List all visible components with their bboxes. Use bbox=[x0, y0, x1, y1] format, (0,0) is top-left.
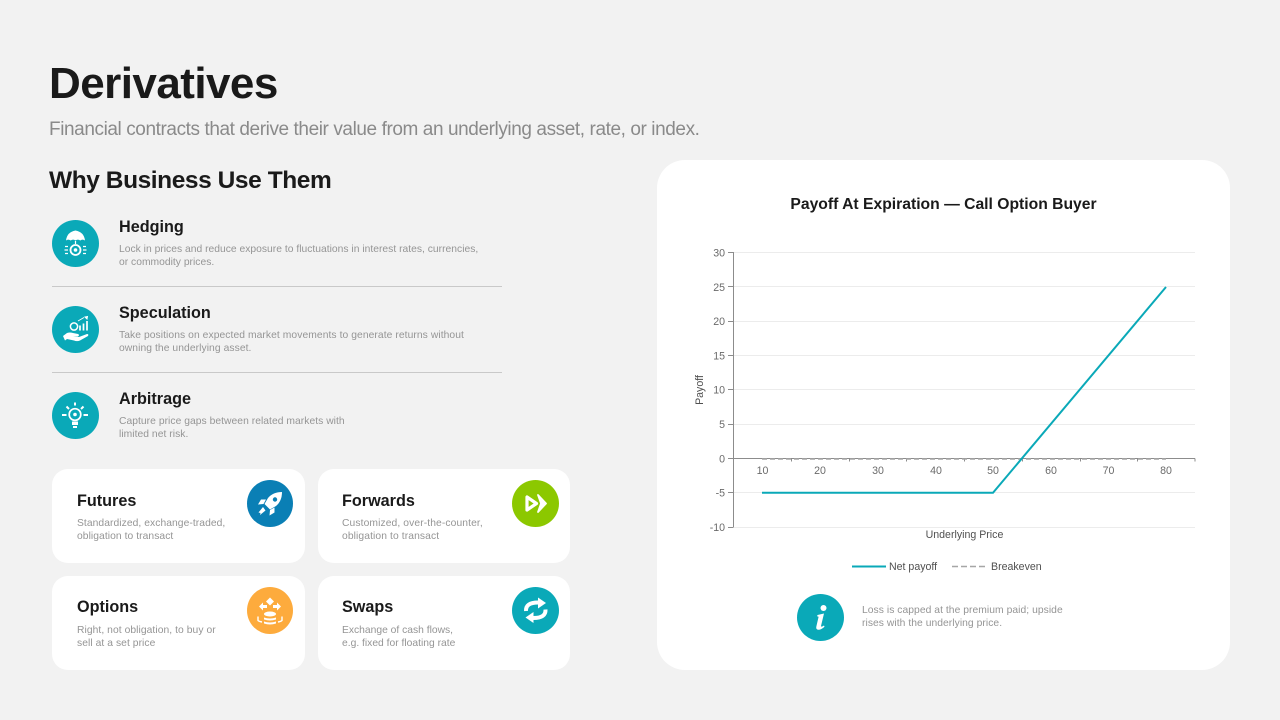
card: Swaps bbox=[318, 576, 570, 670]
axes bbox=[728, 252, 1195, 528]
description: Futures: obligation to transact bbox=[77, 531, 173, 542]
x axis labels bbox=[757, 465, 1172, 477]
y axis labels: 0 bbox=[719, 454, 725, 466]
y axis labels: 10 bbox=[713, 384, 725, 396]
y axis labels: 20 bbox=[713, 316, 725, 328]
callout text bbox=[862, 605, 1063, 629]
divider bbox=[52, 286, 502, 287]
y axis labels bbox=[710, 248, 725, 534]
y axis title: Payoff bbox=[694, 375, 706, 405]
heading: Speculation: Speculation bbox=[119, 304, 211, 322]
legend: Net payoff bbox=[889, 561, 937, 573]
x axis labels: 80 bbox=[1160, 465, 1172, 477]
description: Options: Right, not obligation, to buy or bbox=[77, 625, 216, 636]
panel: payoff chart bbox=[657, 160, 1230, 670]
card: Options bbox=[52, 576, 305, 670]
heading: Futures: Futures bbox=[77, 492, 136, 510]
callout text: Loss is capped at the premium paid; upside bbox=[862, 605, 1063, 616]
icon: info bbox=[797, 594, 844, 641]
y axis labels: 30 bbox=[713, 248, 725, 260]
section heading: Why Business Use Them bbox=[49, 167, 331, 194]
description: Hedging: or commodity prices. bbox=[119, 257, 214, 268]
chart title: Payoff At Expiration — Call Option Buyer bbox=[790, 196, 1097, 213]
description: Swaps: e.g. fixed for floating rate bbox=[342, 638, 455, 649]
x axis labels: 30 bbox=[872, 465, 884, 477]
description: Hedging: Lock in prices and reduce exposure to fluctuations in interest rates, currencies, bbox=[119, 244, 478, 255]
icon: rocket bbox=[247, 480, 293, 527]
description: Forwards bbox=[342, 518, 483, 542]
icon: coins and arrows bbox=[247, 587, 293, 634]
description: Arbitrage: Capture price gaps between related markets with bbox=[119, 416, 345, 427]
heading: Arbitrage: Arbitrage bbox=[119, 390, 191, 408]
description: Swaps bbox=[342, 625, 455, 649]
legend: Breakeven bbox=[991, 561, 1042, 573]
description: Swaps: Exchange of cash flows, bbox=[342, 625, 453, 636]
heading: Hedging: Hedging bbox=[119, 218, 184, 236]
x axis title: Underlying Price bbox=[926, 529, 1003, 541]
description: Options bbox=[77, 625, 216, 649]
description: Arbitrage: limited net risk. bbox=[119, 429, 188, 440]
list item: Hedging bbox=[52, 218, 478, 268]
x axis labels: 40 bbox=[930, 465, 942, 477]
description: Options: sell at a set price bbox=[77, 638, 155, 649]
x axis labels: 50 bbox=[987, 465, 999, 477]
x axis labels: 20 bbox=[814, 465, 826, 477]
description: Speculation bbox=[119, 330, 464, 354]
description: Futures bbox=[77, 518, 225, 542]
description: Hedging bbox=[119, 244, 478, 268]
heading: Options: Options bbox=[77, 598, 138, 616]
description: Forwards: Customized, over-the-counter, bbox=[342, 518, 483, 529]
divider bbox=[52, 372, 502, 373]
subtitle: Financial contracts that derive their value from an underlying asset, rate, or index. bbox=[49, 119, 700, 140]
icon: hand with chart bbox=[52, 306, 99, 353]
description: Forwards: obligation to transact bbox=[342, 531, 439, 542]
card: Forwards bbox=[318, 469, 570, 563]
description: Futures: Standardized, exchange-traded, bbox=[77, 518, 225, 529]
card: Futures bbox=[52, 469, 305, 563]
title: Derivatives bbox=[49, 59, 278, 108]
icon: fast forward bbox=[512, 480, 559, 527]
breakeven line bbox=[762, 458, 1166, 460]
y axis labels: 15 bbox=[713, 350, 725, 362]
y axis labels: -10 bbox=[710, 522, 725, 534]
y axis labels: -5 bbox=[716, 488, 725, 500]
heading: Swaps: Swaps bbox=[342, 598, 393, 616]
x axis labels: 60 bbox=[1045, 465, 1057, 477]
legend bbox=[852, 561, 1042, 573]
icon: umbrella and coin bbox=[52, 220, 99, 267]
heading: Forwards: Forwards bbox=[342, 492, 415, 510]
net payoff line bbox=[762, 287, 1166, 493]
x axis labels: 10 bbox=[757, 465, 768, 477]
icon: light bulb with dollar bbox=[52, 392, 99, 439]
list item: Arbitrage bbox=[52, 390, 345, 440]
description: Arbitrage bbox=[119, 416, 345, 440]
y axis labels: 5 bbox=[719, 419, 725, 431]
icon: refresh arrows bbox=[512, 587, 559, 634]
description: Speculation: owning the underlying asset. bbox=[119, 343, 251, 354]
x axis labels: 70 bbox=[1103, 465, 1114, 477]
y axis labels: 25 bbox=[713, 282, 725, 294]
callout text: rises with the underlying price. bbox=[862, 618, 1002, 629]
description: Speculation: Take positions on expected market movements to generate returns without bbox=[119, 330, 464, 341]
list item: Speculation bbox=[52, 304, 464, 354]
